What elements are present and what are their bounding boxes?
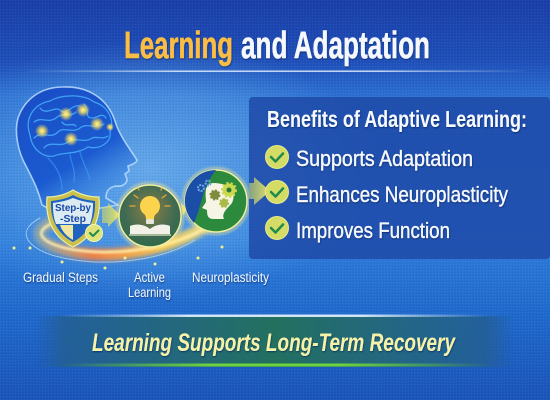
gears — [198, 180, 236, 207]
benefit: enhances neuroplasticity: Enhances Neuroplasticity — [296, 182, 508, 207]
arrow: neuroplasticity to benefits — [249, 177, 270, 205]
benefit: improves function — [266, 216, 450, 243]
title — [124, 25, 430, 67]
step labels — [23, 270, 269, 300]
arrow: active learning to neuroplasticity — [181, 203, 187, 216]
step labels: Neuroplasticity — [192, 270, 269, 285]
title: Learning — [124, 25, 233, 67]
brain sparks — [35, 103, 114, 146]
icon: neuroplasticity head with gears — [183, 168, 249, 234]
brain — [28, 96, 112, 190]
shield text: Step-by — [55, 202, 91, 214]
title divider — [25, 70, 530, 72]
shield text: -Step — [60, 213, 86, 225]
benefit: improves function: Improves Function — [296, 218, 450, 243]
golden swoosh — [12, 218, 224, 270]
shield check badge — [86, 224, 102, 242]
icon: shield step-by-step — [47, 190, 102, 247]
step labels: Learning — [128, 285, 171, 300]
banner — [35, 314, 515, 367]
head illustration with brain — [16, 87, 137, 215]
benefit: supports adaptation: Supports Adaptation — [296, 146, 473, 171]
step labels: Gradual Steps — [23, 270, 98, 285]
icon: active learning lightbulb and book — [117, 183, 183, 249]
head silhouette — [16, 87, 137, 215]
arrow: shield to active learning — [102, 203, 120, 227]
panel: benefits — [249, 97, 550, 259]
shield text — [55, 202, 91, 225]
title: and Adaptation — [241, 25, 430, 67]
step labels: Active — [134, 270, 165, 285]
